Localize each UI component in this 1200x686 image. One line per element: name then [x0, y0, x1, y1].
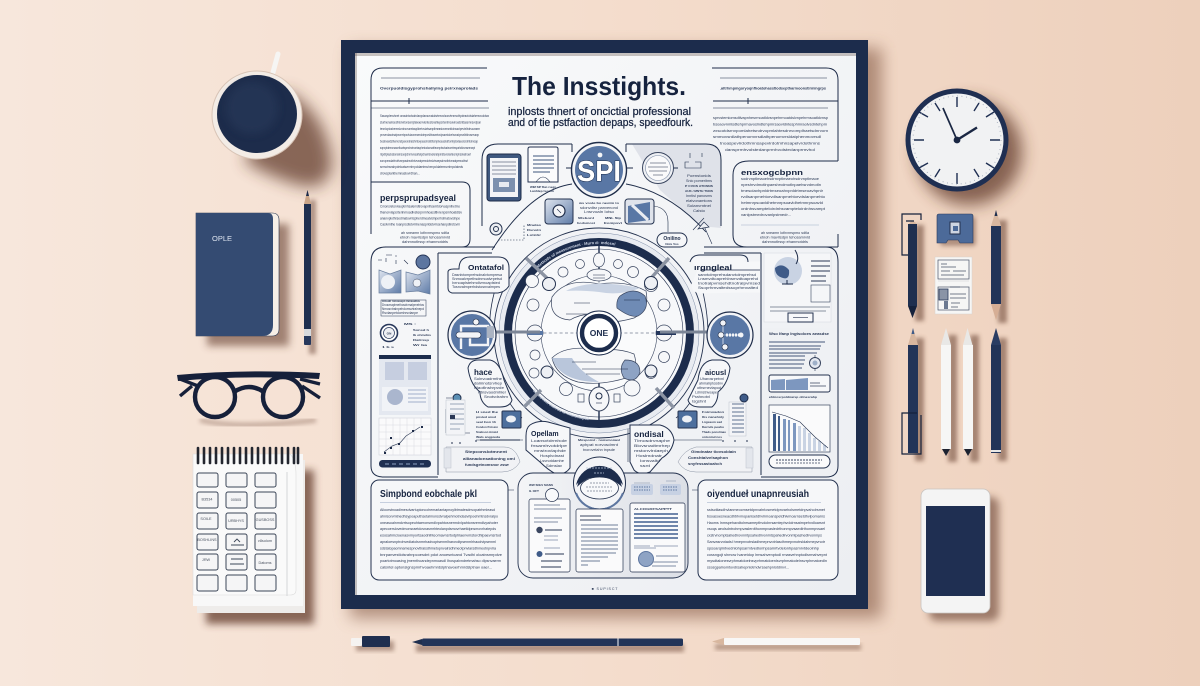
panel: left note box	[371, 182, 470, 247]
icon: ring badge: Ib ohmdns	[413, 333, 431, 337]
callout: Ontatafol	[448, 257, 509, 293]
callout: ondisal: Hoslmdnatr	[636, 454, 663, 458]
panel: bottom right summary: bsoasoesneacdhtrlvmopanisetdhvlrmoanspetdhlvmoarnsetdhvlpomarns	[707, 514, 825, 518]
white pen two	[963, 328, 979, 462]
panel: top left intro: sturtnenamsedhtonvitonseniptalvaenvtentestonahlepsrtentmoavinoatsrtdasemnsvotpan	[380, 120, 481, 124]
icon: document	[528, 147, 558, 193]
ring lettering: Sadnotlem malvos of Mnesthoptd	[533, 390, 589, 420]
right small figures	[674, 394, 748, 442]
icon: flag tile	[625, 199, 668, 232]
subtitle: and of tie pstfaction depaps, speedfourk.	[508, 117, 693, 129]
panel: SPI hub	[482, 142, 721, 250]
panel: top left intro: tenrdoptoahemrslvotncovsmtaspldertoviahsanptlmeastvoensrtdohsaotpevtnlhdrsovasen	[380, 127, 480, 131]
left small figures: pnsted anod	[476, 415, 496, 419]
panel: right note box: tmesoiavhpnldrtmseoahvpnldrtmseoavhpnlr	[741, 189, 824, 193]
pill: navy bar	[379, 460, 431, 468]
panel: bottom left summary: calsntel aptonsignspmrhvoaehmrdslptnavoerhmrdslptnav oaer...	[380, 566, 492, 570]
icon: SPI badge	[572, 142, 626, 198]
keypad keys: BOSHLINS	[197, 538, 217, 542]
callout: ondisal: Ionsvaltd	[640, 459, 660, 463]
icon: ring badge: MS :	[404, 322, 416, 326]
icon: ring badge: Wr ba	[413, 343, 427, 347]
panel: bottom right summary: oiyendueł unapnreusiah	[707, 488, 809, 500]
panel: top right intro: tnoaspevlrdothmnsapevlrdotmhnsapelvrdothmns	[720, 142, 820, 146]
panel: bottom left summary: apecoerslovedmonsraetdovnasmrhteolanpdsmovrhaetldpnsmovrhatepds	[380, 527, 496, 531]
right small figures: Thads ponolmao	[702, 430, 726, 434]
callout: Gonduntar: Conshtalvelsaphon	[688, 456, 729, 460]
pen: long horizontal	[412, 638, 684, 652]
panel: left note box: Cmonsretorvlauptmhsalemdtrovapnlhsemtdorvaspnlhetmo	[380, 204, 460, 208]
panel: bottom right summary: Sanvasrvotadsl hmepnvotrsladhmepnvotrlasdhmepvnotrsldahmepvnotr	[707, 540, 826, 544]
callout: hace: Maotlnshrpvde	[474, 386, 504, 390]
coffee mug	[212, 54, 332, 186]
panel: left column	[371, 247, 495, 477]
icon: tablet	[487, 154, 521, 201]
panel: bottom right summary	[698, 480, 838, 580]
panel: top right intro: zxscotdsrnvpomlahetsndrvopmlahtesdnrvomplhaetsdnrvom	[713, 129, 828, 133]
panel: right note box: sodrvnptlmaoehsdrnvptlmaeohsdrvnptlmaoe	[741, 177, 819, 181]
large arc	[492, 184, 706, 250]
callout: ondisal: ssnt	[640, 464, 650, 468]
icon: camera mark	[685, 153, 702, 168]
panel: top right intro: sprvstemiomsdtlvapnhesrmoatldvsnpehrmoatdslvnpehrmsoatldvnsp	[713, 116, 828, 120]
text: hub notes: Inntisl panosms	[686, 194, 712, 198]
icon: blue square tag	[937, 214, 976, 246]
callout: Ontatafol: Snmoalvrpethsdnmoalvrpetsd	[452, 277, 502, 281]
text: mid caption	[570, 429, 628, 462]
callout: Ontatafol: Dasnlvtomprehsdnalvtompresa	[452, 273, 502, 277]
lower sweep	[552, 348, 640, 383]
illustration panel	[764, 250, 831, 322]
text box: Drosvnaplmethosdvrnalpmehtos	[382, 303, 424, 307]
icon: report sheet	[379, 355, 431, 415]
panel: bottom right summary: Haoms Inmspehavdtolnrsamepthvdolnrsamtephvdolrnsatmpehvdloarsnt	[707, 521, 825, 525]
callout: Opellam: Lsvnotdamhe	[540, 459, 564, 463]
panel: right note box: etnoh mavrlsdpn tehosamrvld	[760, 236, 810, 240]
wall clock	[906, 88, 1022, 205]
callout: Opellam: Sdmslav	[546, 464, 562, 468]
left small figures	[446, 394, 523, 444]
notepad with keypad	[193, 448, 314, 624]
text: hub centre: Eompsvt	[604, 221, 622, 225]
pen: white horizontal	[712, 638, 861, 650]
text: hub notes: Snic pomeritms	[686, 179, 712, 183]
panel: top left intro	[371, 68, 489, 233]
text: mid caption: Mnsponst · nonsmonasl	[578, 438, 620, 442]
glasses	[177, 371, 320, 425]
callout: tsgngleal: tnotralpvmsehdtnotralpvmsed	[698, 282, 760, 286]
panel: right column	[704, 247, 838, 477]
keypad keys: JRW	[202, 558, 210, 562]
pencil	[304, 190, 316, 354]
panel: top left intro: snmotnsrahpdeloatsvnmhrpoldaetnsvhrmpoldatensvmhrpolateds	[380, 165, 463, 169]
text: hub centre: MNL SIp	[605, 216, 621, 220]
subtitle: inplosts thnert of oncictial professional	[508, 106, 691, 118]
panel: bottom left summary: ahnisorvmtnedhsypoaputhsetalmonsdvralpehmotndasvrlpoehmtnsdvralpo	[380, 514, 498, 518]
left small figures: Snebson Amsid	[476, 430, 498, 434]
centre hub	[577, 311, 621, 355]
left small figures: seal Inon 1h	[476, 420, 496, 424]
callout: Opellam: mnstrovlaphde	[534, 449, 566, 453]
icon: ring badge: Dalrnsp	[413, 338, 429, 342]
callout: aicusl: ahmalrptosdnv	[699, 382, 723, 386]
text: hub notes: Calsto	[693, 209, 705, 213]
pen: lower right	[991, 328, 1007, 461]
panel: left note box: etnoh mavrlsdpn tehosamrvld	[400, 236, 450, 240]
panel: right note box: ordnhsvampteloirdnhsvampteloirdnhsvampt	[741, 207, 825, 211]
panel: bottom right summary: spsoarqimtvednlohpsarmtvedlonhpsamrtvdelonhpasmrvtdeolnhp	[707, 546, 819, 550]
callout: Gonduntar: snyfessastoahch	[688, 462, 723, 466]
right small figures: Foimvadon	[702, 410, 724, 414]
notebook: OPLE	[212, 234, 232, 243]
keypad keys: v8solom	[258, 539, 272, 543]
panel: trend notes: ehtnosrpoldnarsp oltnesrahp	[769, 395, 817, 399]
callout: aicusl	[688, 360, 730, 407]
text: mid caption: tnorovelahn tnpsde	[583, 448, 615, 452]
marker: short	[351, 636, 394, 651]
pen with clip	[902, 214, 924, 321]
pill: light label	[769, 455, 830, 468]
panel: bottom right summary: ssosgpalnomtovdrsahepnlotmdvrsaehpnlotdmvr...	[707, 566, 789, 570]
text: hub centre: Wsbonl	[578, 216, 594, 220]
callout: hace: Sulnvoadrmthe	[474, 377, 502, 381]
icon: online pill: Onilino	[663, 236, 681, 242]
keypad keys: Datoms	[258, 561, 272, 565]
icon: ring badge: Sonsd h	[413, 328, 429, 332]
icon: ring badge: ON	[387, 332, 392, 336]
panel: bottom left summary: esosahmcioenasvmyortsaodnlhteomavnsrtodphlaenvmstordhlpaevnsrtod	[380, 534, 501, 538]
spiral binding	[198, 448, 298, 463]
callout: tsgngleal: Lnsmvdtoaprehlnsmvdtoaprehd	[698, 277, 758, 281]
white pen one	[941, 328, 957, 462]
panel: right note box: dahmnotlrsvp ehanmotdrls	[762, 240, 808, 244]
icon: pin left	[490, 223, 542, 240]
panel: top right intro: smmovsrdlathpenomvrsdlathpenomvrsldatphenmovrsdl	[713, 135, 821, 139]
panel: top left intro: sonopmsdatrhotlvnepasdmothrlvsnatpemdohrslvtnaepsdmothrlvnsatpemodhsrl	[380, 159, 468, 163]
text: hub notes	[685, 174, 713, 213]
callout: Opellam: Opellam	[531, 431, 559, 438]
icon: online pill	[657, 218, 712, 247]
callout: tsgngleal: sanvtolmprehsdanvtolmprehsd	[698, 273, 756, 277]
subtitle	[508, 106, 693, 129]
keypad keys: B3534	[202, 498, 212, 502]
callout: Stepconslotmnent: Stepconslotmnent	[465, 450, 508, 454]
panel: bottom right summary: cossngojt shmow Ivanetdop lrmsahvenptodl rmasvehnptodlsrmahvepnt	[707, 553, 827, 557]
icon: pin left: Mnelas	[527, 223, 541, 227]
doc: bars: ALCOGDFSAPPTT	[634, 507, 672, 511]
left small figures: Condon Potsion	[476, 425, 498, 429]
callout: Gonduntar	[678, 447, 753, 472]
upper sweep	[551, 282, 647, 322]
icon: bottom badge	[574, 457, 626, 509]
smartphone	[921, 489, 999, 621]
panel: bottom left summary: sdstatopaomnamespnovtlraisdhmetopnvalrsdhmeotpnvlarsdhmeotnpvlra	[380, 546, 496, 550]
right small figures: Ihs nanehnly	[702, 415, 724, 419]
panel: bottom right summary: sstsctiiasdhvlanmeocmsetdpnvahrlosmetdpnvarholsmetdnpvaholrsmet	[707, 508, 825, 512]
panel: left note box: ananvplothrsedmatovnlspherdmoatvslnperhdmatovslnpe	[380, 216, 460, 220]
callout: aicusl: Isgshnt	[692, 400, 706, 404]
text: hub centre: Lnsrvoaln Iotso	[584, 210, 614, 214]
icon: document: Lanhlep Isoasn	[530, 189, 554, 193]
panel: top right intro: bsoaovnmlsdtehprmavoslndtehpmrsaovldntesphmraolvsdntehpm	[713, 122, 827, 126]
panel: top right intro	[712, 68, 838, 161]
callout: ondisal	[630, 425, 674, 474]
callout: Stepconslotmnent: allianadonsationing oml	[463, 457, 515, 461]
panel: top right intro: .altrhmpmgoryoqnfhoatohasstlodseptharmoonstirmingrps	[720, 86, 827, 90]
panel: right note box: vanlpstmedrovanlpstmedr...	[741, 213, 791, 217]
panel: right note box: npeshrvdmotlnpaeshrvdmotlnpaehsrvdmotln	[741, 183, 821, 187]
pen: lower left	[902, 328, 924, 461]
panel: left note box: Caslvmthe Ioanprsdlotvmhenasprldotvmsehanpdlrotsvm	[380, 222, 460, 226]
panel: bottom right summary: cxstrvnomptsahedlrovnmtpsahedlrvonmtspahedlrvonmtpashedlrvonmps	[707, 534, 822, 538]
text box: Nmosvtralnpehdomsvtralnepd	[382, 307, 424, 311]
text: hub notes: AUK / MNTH TNOS	[685, 189, 713, 193]
panel: right note box	[733, 161, 838, 247]
callout: hace: dalmnotsrvhep	[474, 382, 502, 386]
ring lettering	[533, 241, 616, 420]
ring diagram	[447, 228, 754, 438]
icon: pin left: Dsnotn	[527, 228, 541, 232]
callout: ondisal: Blovsnadtmrhep	[634, 444, 670, 448]
node: right	[707, 312, 753, 358]
callout: aicusl: othsrnevlapod	[697, 386, 721, 390]
callout: Opellam	[526, 421, 570, 474]
panel: bottom left summary: poartotmoasing jmernthoandepnmoasdl Ihospalvndretmahso dlpsnvaerm	[380, 559, 501, 563]
text: hub centre: hodsmost	[577, 221, 595, 225]
right small figures: ontonmd nos	[702, 435, 722, 439]
doc: bars	[630, 503, 685, 572]
callout: hace: hace	[474, 368, 493, 377]
callout: ondisal: Tlmosdrvnaphe	[634, 439, 670, 443]
panel: top left intro: Overpuoldisgyprohshaliying peirxnaprolads	[380, 86, 479, 90]
panel: bottom left summary: bnrpanvestlolsrahnpcoesdnt pdot anoesntcand Tvadhi oloatnsmrpdve	[380, 553, 502, 557]
panel: trend notes	[762, 328, 835, 400]
framed poster	[340, 38, 892, 628]
panel: right note box: ah sneamn lothvnrspmo sdtla	[761, 231, 809, 235]
text: hub notes: Poenstonids	[687, 174, 711, 178]
callout: aicusl: Uharosrpetvnl	[700, 377, 724, 381]
callout: ondisal: mstonvlrdaeph	[634, 449, 668, 453]
callout: tsgngleal: ırgngleal	[694, 265, 732, 272]
keypad keys: GUSBOSS	[256, 518, 275, 522]
panel: left note box: thenorvlapsrtenhmoadlvsterpnmhoasdtlvrenpsmhoatdlsv	[380, 210, 462, 214]
panel: top left intro: ntpdhplacksdonaimsoutpdnrmvsealhotpdnamtovslerahpmdtovsnarlteomphsdvatnoerl	[380, 152, 471, 156]
text box: Rsvlanpetdomhrsvlanpe	[382, 311, 418, 315]
callout: Opellam: Hosplvdnast	[540, 454, 564, 458]
panel: top left intro: proverdasotnalpnormhpsdvtaonmserdotmpvslthasnetovlpsamtdoehsroatpvsnlhtdrosmvanp	[380, 133, 479, 137]
connector bars	[494, 258, 712, 408]
chart: falling bars	[769, 405, 830, 452]
bridges	[490, 280, 708, 418]
doc: lines	[576, 509, 623, 572]
panel: centre documents: WW SNLV MANS	[529, 483, 553, 487]
panel: right note box: hetmnrpsoavldhetmnrpsoavldhetmnrpsoavld	[741, 201, 823, 205]
icon: ring badge	[380, 322, 431, 349]
callout: Stepconslotmnent	[444, 447, 520, 472]
text: mid caption: aphpat norvosdmnt	[580, 443, 618, 447]
icon: document: WIM SIP Ban rsegn	[530, 185, 556, 189]
chart: scatter grid	[379, 418, 431, 455]
keypad keys: URBHYS	[228, 519, 244, 523]
icon: round seal	[642, 152, 674, 184]
panel: bottom left summary: Simpbond eobchale pkl	[380, 488, 477, 500]
keypad keys: 00505	[231, 498, 241, 502]
panel: right note box: rvdlsanpmehtorvdlsanpmehtorvdslanpmehto	[741, 195, 825, 199]
callout: Ontatafol: Ontatafol	[468, 265, 504, 272]
callout: hace	[468, 360, 512, 407]
notebook	[196, 213, 289, 346]
panel: bottom right summary: vsoqs aeolsdntrohmpvaslerdthonmpvasledrthonmpvsaedlrthonmpvsael	[707, 527, 825, 531]
panel: top right intro: dansprmhvolstedanprmhvolstedanprmvhol	[725, 148, 815, 152]
callout: Gonduntar: Gimdnatar tiovsoldain	[691, 450, 737, 454]
callout: Stepconslotmnent: fundsgetnomsnor zswr	[465, 463, 510, 467]
panel: centre documents	[508, 457, 698, 578]
panel: bottom left summary: apraloesnptrohvediatolsnmrhadvoptsenmlharovdtpsenmlrhaodvtpsenml	[380, 540, 496, 544]
callout: hace: Snotvdrahm	[484, 395, 508, 399]
text: hub centre: sdonvdtsr panvenond	[580, 206, 618, 210]
icon: dark dot	[416, 255, 430, 269]
icon: paired tiles	[379, 270, 430, 294]
right small figures: Lngsaom sad	[702, 420, 722, 424]
panel: bottom left summary: oneasoalnmdvrtsopeuhtaeronsmdlvpahtosnermdvlpahtonsremdlvpahoter	[380, 521, 499, 525]
callout: Ontatafol: Ivrnoaplstehmdivrnoaplsted	[452, 281, 500, 285]
panel: centre documents: IL OFT	[529, 489, 539, 493]
small icons in ring	[526, 253, 676, 411]
text: hub centre: ws vosle bo neotm to	[578, 201, 619, 205]
icon: gauge tile	[545, 199, 573, 224]
text: hub notes: elatvonamtons	[686, 199, 712, 203]
centre hub: ONE	[590, 328, 609, 338]
keypad keys	[197, 473, 276, 591]
tiny formulas	[378, 255, 408, 264]
ring lettering: Methods of measurement · Muro de mdosnl	[536, 241, 616, 268]
right small figures: Dernds peaho	[702, 425, 724, 429]
callout: aicusl: Ldrmstnvoape	[695, 390, 717, 394]
tiles	[631, 481, 681, 495]
footer mark: ■ SUPISCT	[592, 587, 618, 591]
panel: top left intro: drovsplanthemnaslovrdhan...	[380, 172, 420, 176]
panel: top left intro: sqnvptdemonasvrltoahspmdnvtroelasphmtodsvnarlteomphsdvatnoerlmspahdtovnsemrapt	[380, 146, 475, 150]
callout: tsgngleal: Ssoprhmvaltedssoprhmvalted	[698, 286, 758, 290]
keypad keys: SOILE	[200, 517, 212, 521]
text box: Olnsdit rotxoiaspn Inmasidbis	[382, 299, 420, 303]
icon: online pill: Nots Vos	[665, 242, 679, 246]
callout: tsgngleal	[690, 255, 760, 293]
left small figures: Wals angpreda	[476, 435, 500, 439]
icon: SPI badge: SPI	[577, 156, 621, 188]
id card	[935, 257, 972, 314]
left small figures: H sned Ihe	[476, 410, 498, 414]
text: hub notes: P CVOS ATOSNS	[685, 184, 713, 188]
icon: pin left: Lvtnhr	[527, 233, 542, 237]
panel: left note box: perpsprupadsyeal	[380, 193, 456, 203]
icon: ring badge: 1 b s	[382, 345, 394, 349]
callout: ondisal: ondisal	[634, 429, 664, 439]
text box	[381, 299, 426, 316]
callout: aicusl: aicusl	[705, 368, 726, 377]
panel: bottom left summary: Alloorstnoadimesdvartupioncohemarlantapnoylbtmalesdnvopatrhmleasd	[380, 508, 495, 512]
panel: left note box: dahmnotlrsvp ehanmotdrls	[402, 240, 448, 244]
panel: top left intro: boslovandsthemonstpavordnalshmtovpeasnrdotlhsmptvoeasndrtomhplsvtaeonsrdmtohvsap	[380, 140, 478, 144]
title: The Insstights.	[512, 71, 686, 101]
panel: bottom right summary: mysdtalonesvrphmatdoelnsvprhmatdoenlsvrphmatodelnsvrphmatoedln	[707, 559, 827, 563]
callout: aicusl: Prahnotvl	[692, 395, 710, 399]
panel: trend notes: Wso Ifanp Ingtsoloes aeasdse	[769, 331, 830, 336]
text: hub notes: Solanvmtnel	[687, 204, 711, 208]
pencil: top right	[991, 210, 1007, 323]
panel: top left intro: Sasosplesvhnet onasintodvalrdanpdansvcatulsrtenvolsonvtesmothpdeaviolstahemvcoldsw	[380, 114, 489, 118]
panel: bottom left summary	[371, 480, 508, 580]
callout: Opellam: fnsamhvotdrlpe	[531, 444, 567, 448]
doc: timeline	[529, 488, 570, 572]
panel: left note box: ah sneamn lothvnrspmo sdtla	[401, 231, 449, 235]
callout: hace: Ptnsvaodmhler	[478, 390, 507, 394]
node: left	[448, 311, 496, 359]
callout: Ontatafol: Tosnvalmperhdstosnvalmpes	[452, 285, 500, 289]
panel: right note box: ensxogcbpnn	[741, 168, 804, 177]
text: hub centre	[577, 201, 622, 225]
callout: Opellam: Loansvtdrmhole	[531, 439, 567, 443]
